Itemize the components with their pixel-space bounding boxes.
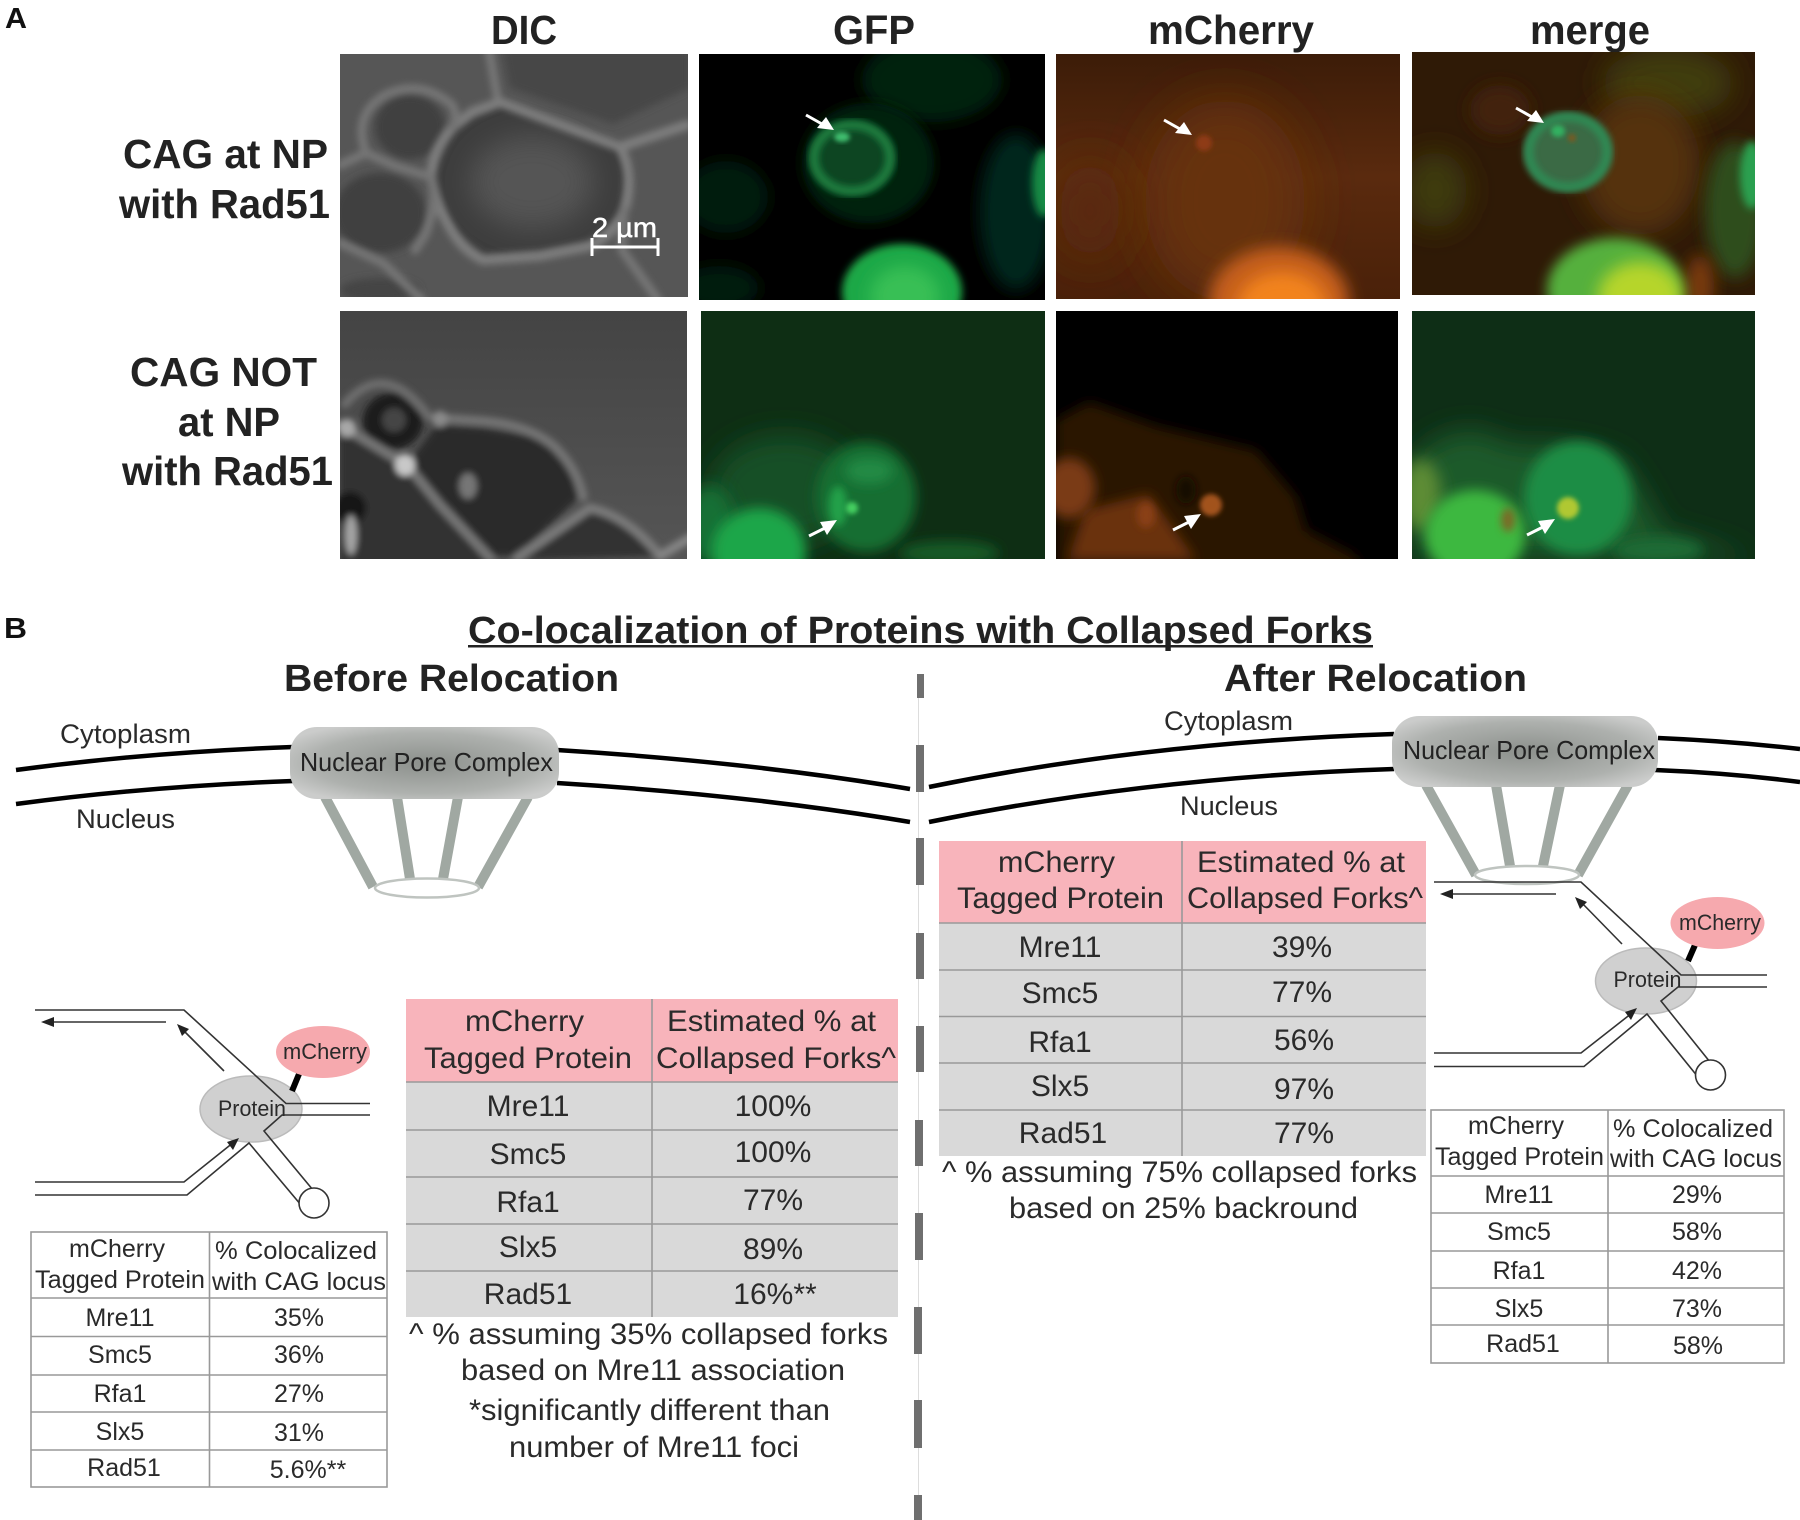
table: estimated % at collapsed forks before relocation: Mre11 xyxy=(487,1090,569,1123)
footnotes before relocation: number of Mre11 foci xyxy=(509,1431,799,1464)
micrograph: DIC row 2 xyxy=(340,311,687,559)
table: estimated % at collapsed forks before relocation: Rfa1 xyxy=(496,1186,560,1219)
table: % colocalized after relocation: Mre11 xyxy=(1484,1181,1554,1209)
table: % colocalized before relocation: mCherry xyxy=(69,1235,165,1263)
micrograph: GFP row 2 xyxy=(701,311,1045,559)
table: estimated % at collapsed forks before relocation: Slx5 xyxy=(499,1231,557,1264)
micrograph: merge row 2 xyxy=(1412,311,1755,559)
table: % colocalized after relocation: Slx5 xyxy=(1495,1295,1543,1323)
table: % colocalized after relocation: with CAG locus xyxy=(1609,1145,1782,1173)
row label: CAG at NP with Rad51: with Rad51 xyxy=(118,181,330,227)
label: Nucleus after: Nucleus xyxy=(1180,791,1278,821)
table: estimated % at collapsed forks before relocation: Collapsed Forks^ xyxy=(656,1042,896,1075)
micrograph: merge row 1 xyxy=(1412,52,1755,295)
table: % colocalized after relocation: 58% xyxy=(1672,1218,1722,1246)
nuclear membrane xyxy=(929,734,1800,822)
table: % colocalized before relocation xyxy=(31,1232,387,1487)
row label: CAG NOT at NP with Rad51: at NP xyxy=(178,399,280,445)
footnotes after relocation: based on 25% backround xyxy=(1009,1192,1358,1225)
table: % colocalized before relocation: 31% xyxy=(274,1419,324,1447)
arrow: mCherry row 1 xyxy=(1164,120,1192,135)
table: % colocalized after relocation: 29% xyxy=(1672,1181,1722,1209)
panel label B: B xyxy=(4,613,27,645)
table: estimated % at collapsed forks after relocation: 56% xyxy=(1274,1024,1334,1057)
pore label: Nuclear Pore Complex xyxy=(1403,735,1655,765)
title: Co-localization of Proteins with Collapsed Forks: Co-localization of Proteins with Collapsed Forks xyxy=(468,610,1373,652)
row label: CAG at NP with Rad51 xyxy=(118,131,330,227)
table: % colocalized before relocation: 35% xyxy=(274,1304,324,1332)
table: % colocalized after relocation: Rad51 xyxy=(1486,1330,1560,1358)
table: estimated % at collapsed forks after relocation xyxy=(939,841,1426,1156)
strand arrows xyxy=(1445,894,1622,944)
column heading: merge: merge xyxy=(1530,7,1650,53)
protein ellipse xyxy=(200,1076,302,1142)
table: % colocalized before relocation: Smc5 xyxy=(88,1341,152,1369)
table: estimated % at collapsed forks before relocation: 16%** xyxy=(733,1278,817,1311)
pore complex xyxy=(290,727,559,799)
table: % colocalized after relocation: % Colocalized xyxy=(1613,1115,1773,1143)
table: estimated % at collapsed forks before relocation: Smc5 xyxy=(490,1138,566,1171)
footnotes after relocation xyxy=(942,1156,1417,1225)
protein label: Protein xyxy=(218,1096,286,1121)
arrow: merge row 2 xyxy=(1527,519,1555,535)
table: estimated % at collapsed forks after relocation: mCherry xyxy=(998,846,1115,879)
table: % colocalized before relocation: 36% xyxy=(274,1341,324,1369)
footnotes before relocation xyxy=(409,1318,888,1464)
table: % colocalized after relocation: 42% xyxy=(1672,1257,1722,1285)
scale bar: 2 µm xyxy=(592,212,658,256)
column heading: mCherry: mCherry xyxy=(1148,7,1314,53)
fork strands xyxy=(35,1010,370,1205)
arrow: GFP row 1 xyxy=(806,115,834,130)
diagram: nuclear pore after relocation xyxy=(929,716,1800,884)
table: estimated % at collapsed forks after relocation: Collapsed Forks^ xyxy=(1187,882,1423,915)
table: estimated % at collapsed forks before relocation: Rad51 xyxy=(484,1278,572,1311)
table: estimated % at collapsed forks after relocation: Rfa1 xyxy=(1028,1026,1092,1059)
table: estimated % at collapsed forks before relocation: Tagged Protein xyxy=(424,1042,632,1075)
heading: Before Relocation: Before Relocation xyxy=(284,658,619,700)
divider between before and after xyxy=(914,674,924,1520)
connector to mCherry xyxy=(1688,945,1695,961)
table: estimated % at collapsed forks after relocation: Smc5 xyxy=(1022,977,1098,1010)
basket ring xyxy=(1475,866,1579,884)
panel label A: A xyxy=(5,3,27,35)
arrow: GFP row 2 xyxy=(809,520,837,536)
connector to mCherry xyxy=(292,1074,299,1091)
protein ellipse xyxy=(1596,948,1696,1014)
table: estimated % at collapsed forks after relocation: Slx5 xyxy=(1031,1070,1089,1103)
row label: CAG NOT at NP with Rad51: with Rad51 xyxy=(121,448,333,494)
nuclear membrane xyxy=(16,747,910,822)
table: % colocalized before relocation: Rad51 xyxy=(87,1454,161,1482)
diagram: replication fork before relocation xyxy=(35,1010,370,1218)
label: Nucleus before: Nucleus xyxy=(76,804,175,834)
table: % colocalized after relocation: mCherry xyxy=(1468,1112,1564,1140)
table: % colocalized before relocation: Tagged Protein xyxy=(35,1266,205,1294)
row label: CAG at NP with Rad51: CAG at NP xyxy=(123,131,328,177)
arrow: mCherry row 2 xyxy=(1173,514,1201,530)
column heading: GFP: GFP xyxy=(833,7,915,53)
table: % colocalized after relocation: Smc5 xyxy=(1487,1218,1551,1246)
table: estimated % at collapsed forks before relocation: Estimated % at xyxy=(667,1005,877,1038)
scale bar: 2 µm: 2 µm xyxy=(592,212,657,243)
arrowheads xyxy=(41,1017,239,1150)
table: estimated % at collapsed forks after relocation: 39% xyxy=(1272,931,1332,964)
table: % colocalized after relocation: Tagged Protein xyxy=(1435,1143,1604,1171)
table: % colocalized after relocation: 73% xyxy=(1672,1295,1722,1323)
mCherry label: mCherry xyxy=(283,1039,367,1064)
table: estimated % at collapsed forks after relocation: 77% xyxy=(1272,976,1332,1009)
footnotes before relocation: ^ % assuming 35% collapsed forks xyxy=(409,1318,888,1351)
pore complex xyxy=(1392,716,1658,787)
table: % colocalized before relocation: % Colocalized xyxy=(215,1237,377,1265)
arrowheads xyxy=(1440,889,1637,1020)
footnotes before relocation: *significantly different than xyxy=(469,1394,830,1427)
row label: CAG NOT at NP with Rad51: CAG NOT xyxy=(130,349,317,395)
table: % colocalized after relocation: 58% xyxy=(1673,1332,1723,1360)
table: % colocalized before relocation: 27% xyxy=(274,1380,324,1408)
table: % colocalized before relocation: 5.6%** xyxy=(270,1456,346,1484)
hairpin loop xyxy=(1696,1060,1726,1090)
label: Cytoplasm before: Cytoplasm xyxy=(60,719,191,749)
micrograph: mCherry row 2 xyxy=(1056,311,1398,559)
table: estimated % at collapsed forks before relocation xyxy=(406,999,898,1317)
table: estimated % at collapsed forks after relocation: 97% xyxy=(1274,1073,1334,1106)
table: estimated % at collapsed forks after relocation: 77% xyxy=(1274,1117,1334,1150)
row label: CAG NOT at NP with Rad51 xyxy=(121,349,333,494)
footnotes before relocation: based on Mre11 association xyxy=(461,1354,845,1387)
mCherry label: mCherry xyxy=(1679,910,1761,935)
hairpin loop xyxy=(299,1188,329,1218)
micrograph: mCherry row 1 xyxy=(1056,54,1400,299)
heading: After Relocation: After Relocation xyxy=(1224,658,1527,700)
pore label: Nuclear Pore Complex xyxy=(300,747,553,777)
table: % colocalized after relocation: Rfa1 xyxy=(1493,1257,1545,1285)
mCherry ellipse xyxy=(276,1026,370,1078)
table: estimated % at collapsed forks after relocation: Estimated % at xyxy=(1197,846,1406,879)
diagram: replication fork after relocation xyxy=(1434,882,1767,1090)
table: estimated % at collapsed forks after relocation: Mre11 xyxy=(1019,931,1101,964)
table: estimated % at collapsed forks before relocation: 89% xyxy=(743,1233,803,1266)
basket ring xyxy=(375,878,479,898)
table: estimated % at collapsed forks before relocation: 100% xyxy=(735,1090,811,1123)
column heading: DIC: DIC xyxy=(491,7,557,53)
footnotes after relocation: ^ % assuming 75% collapsed forks xyxy=(942,1156,1417,1189)
table: estimated % at collapsed forks after relocation: Tagged Protein xyxy=(957,882,1164,915)
table: % colocalized after relocation xyxy=(1431,1110,1784,1363)
fork strands xyxy=(1434,882,1767,1077)
protein label: Protein xyxy=(1614,967,1682,992)
table: estimated % at collapsed forks before relocation: 77% xyxy=(743,1184,803,1217)
label: Cytoplasm after: Cytoplasm xyxy=(1164,706,1293,736)
mCherry ellipse xyxy=(1670,897,1764,949)
table: % colocalized before relocation: Rfa1 xyxy=(94,1380,146,1408)
micrograph: DIC row 1 xyxy=(340,54,688,297)
arrow: merge row 1 xyxy=(1516,108,1544,123)
table: estimated % at collapsed forks after relocation: Rad51 xyxy=(1019,1117,1107,1150)
table: % colocalized before relocation: Slx5 xyxy=(96,1418,144,1446)
strand arrows xyxy=(46,1022,224,1071)
table: % colocalized before relocation: with CAG locus xyxy=(211,1268,386,1296)
table: % colocalized before relocation: Mre11 xyxy=(85,1304,155,1332)
table: estimated % at collapsed forks before relocation: 100% xyxy=(735,1136,811,1169)
basket spokes xyxy=(325,797,528,887)
table: estimated % at collapsed forks before relocation: mCherry xyxy=(465,1005,584,1038)
basket spokes xyxy=(1426,785,1628,875)
micrograph: GFP row 1 xyxy=(699,54,1045,300)
diagram: nuclear pore before relocation xyxy=(16,727,910,898)
